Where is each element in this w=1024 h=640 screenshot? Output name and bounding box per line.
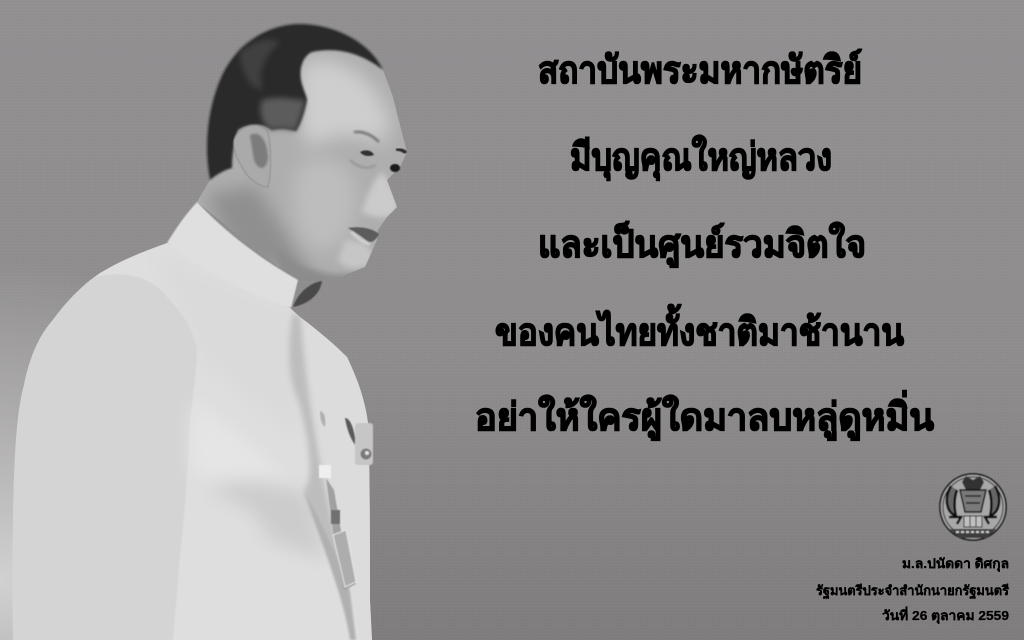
front panel (306, 322, 372, 638)
quote line 2: มีบุญคุณใหญ่หลวง (570, 135, 832, 181)
neck shadow (206, 182, 310, 267)
portrait photo of minister in profile (0, 10, 420, 640)
quote line 4: ของคนไทยทั้งชาติมาช้านาน (495, 304, 904, 354)
forehead highlight (298, 59, 390, 150)
hair (207, 24, 383, 180)
signature block (816, 556, 1009, 624)
cheek highlight (294, 158, 355, 251)
signatory title: รัฐมนตรีประจำสำนักนายกรัฐมนตรี (816, 583, 1009, 600)
quote line 5: อย่าให้ใครผู้ใดมาลบหลู่ดูหมิ่น (475, 390, 934, 441)
jacket body (12, 243, 372, 640)
date: วันที่ 26 ตุลาคม 2559 (882, 606, 1009, 624)
mouth (348, 227, 379, 242)
quote text (475, 49, 934, 441)
quote line 1: สถาบันพระมหากษัตริย์ (538, 49, 862, 92)
lapel pin and badge (319, 411, 373, 590)
neck and head (197, 22, 407, 282)
ear (234, 126, 271, 187)
signatory name: ม.ล.ปนัดดา ดิศกุล (902, 556, 1009, 572)
eyes and brows (350, 132, 406, 172)
sleeve (0, 274, 197, 640)
icon: government seal (940, 474, 1006, 540)
mandarin collar (167, 202, 322, 308)
placket shadow (288, 313, 338, 557)
quote line 3: และเป็นศูนย์รวมจิตใจ (538, 221, 866, 268)
nose (362, 172, 398, 217)
